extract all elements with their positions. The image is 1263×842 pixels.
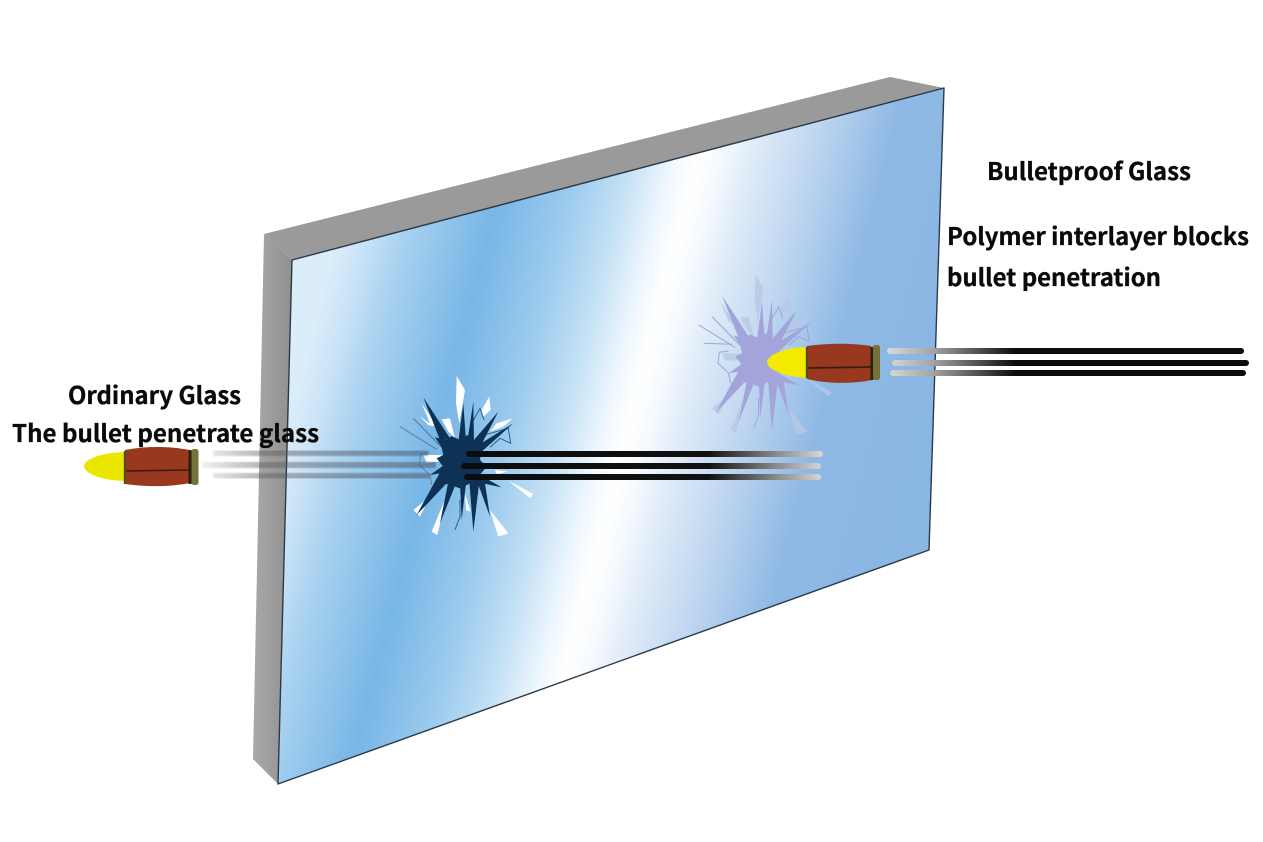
bullet casing [807, 344, 872, 383]
bullet tip [84, 452, 126, 481]
trails through the ordinary glass [202, 453, 820, 477]
bullet tip [767, 347, 808, 378]
left bullet [84, 447, 198, 486]
white glass shards [413, 376, 533, 537]
heading: Bulletproof Glass [987, 152, 1191, 187]
bullet cap [873, 345, 880, 380]
label: ordinary glass [12, 376, 319, 449]
top edge of glass [264, 77, 944, 260]
dark bullet hole: bullet penetrated [400, 376, 533, 537]
description line one: Polymer interlayer blocks [947, 217, 1249, 252]
faded trail lines before the glass hole [202, 453, 436, 476]
left edge of glass [253, 234, 292, 784]
trails behind the stopped bullet [890, 351, 1246, 373]
right bullet [767, 344, 880, 383]
description line two: bullet penetration [947, 258, 1161, 293]
front face of glass [278, 88, 944, 784]
description: The bullet penetrate glass [12, 414, 319, 449]
purple crack mark: bullet stopped [699, 274, 832, 435]
dark blast [417, 397, 513, 532]
bullet casing [125, 447, 190, 486]
crack lines [400, 408, 511, 530]
label: bulletproof glass [947, 152, 1249, 293]
black trail lines past the hole [464, 454, 820, 477]
heading: Ordinary Glass [68, 376, 241, 411]
glass pane [253, 77, 944, 784]
bullet cap [192, 449, 198, 485]
